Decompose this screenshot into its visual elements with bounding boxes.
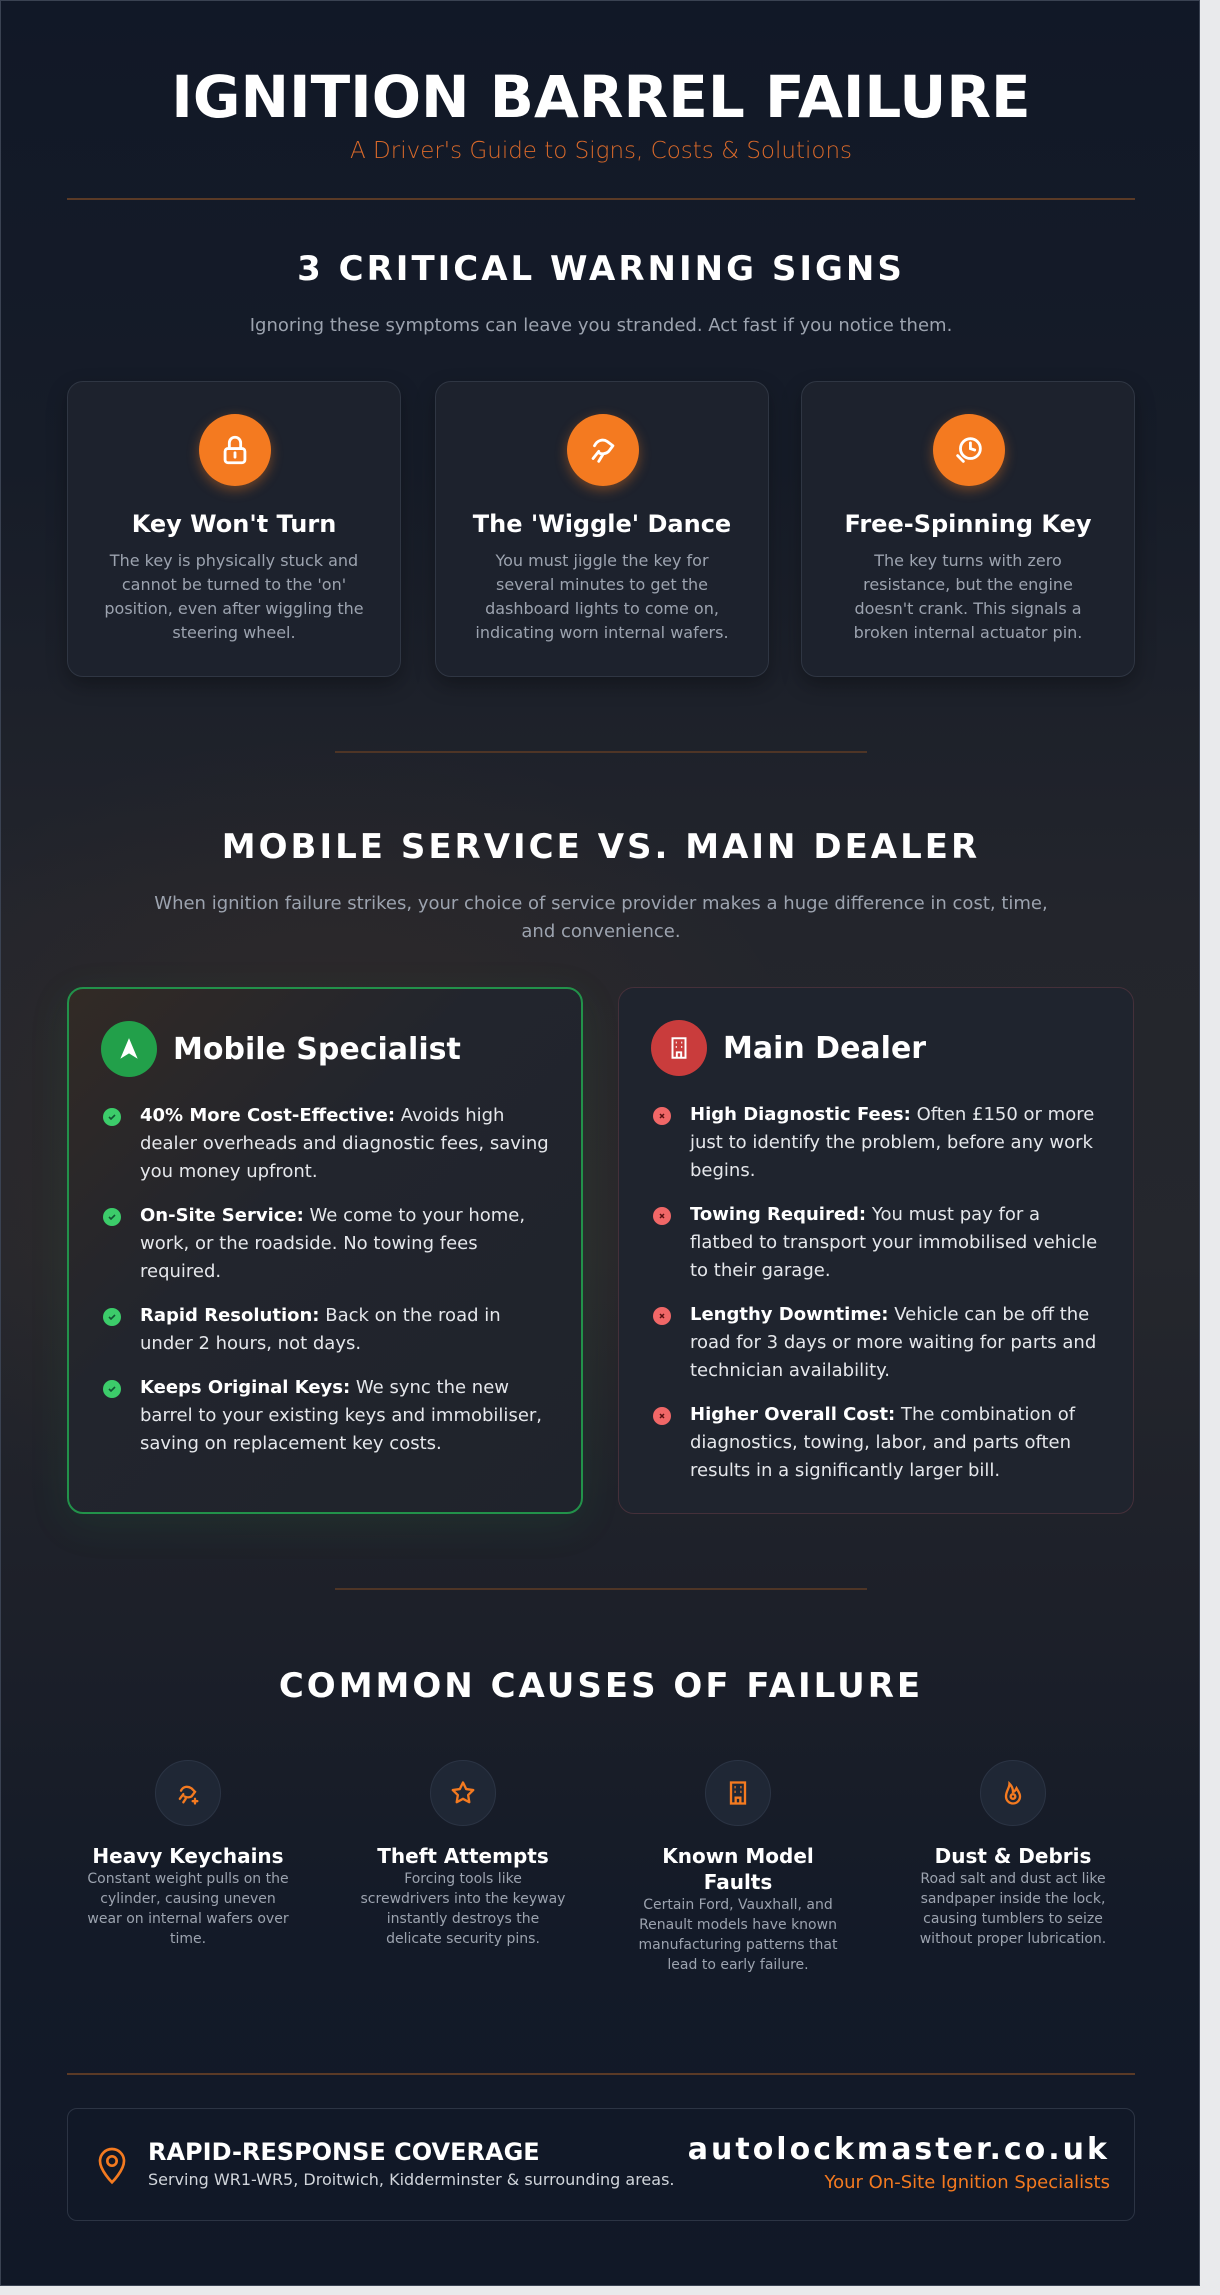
heading: warning signs: 3 CRITICAL WARNING SIGNS	[297, 249, 905, 289]
header: mobile specialist	[101, 1021, 461, 1077]
icon: star	[430, 1760, 496, 1826]
list: benefits: On-Site Service: We come to your home, work, or the roadside. No towing fees required.	[140, 1205, 525, 1282]
cause: dust: Dust & Debris	[935, 1844, 1091, 1868]
card: key won't turn: The key is physically stuck and cannot be turned to the 'on' position, even after wiggling the steering wheel.	[104, 551, 364, 642]
icon: flame	[980, 1760, 1046, 1826]
list: drawbacks	[653, 1104, 1097, 1481]
list: benefits	[103, 1105, 549, 1454]
subtitle: A Driver's Guide to Signs, Costs & Solutions	[350, 138, 852, 164]
list: benefits: Keeps Original Keys: We sync the new barrel to your existing keys and immobiliser, saving on replacement key costs.	[140, 1377, 542, 1454]
intro text: Ignoring these symptoms can leave you stranded. Act fast if you notice them.	[250, 315, 952, 336]
cause: heavy keychains: Constant weight pulls on the cylinder, causing uneven wear on internal wafers over time.	[87, 1871, 289, 1947]
icon: keychain	[155, 1760, 221, 1826]
icon: spin	[933, 414, 1005, 486]
footer panel	[67, 2108, 1135, 2221]
cause: model faults: Faults	[704, 1870, 772, 1894]
list: benefits: 40% More Cost-Effective: Avoids high dealer overheads and diagnostic fees, saving you money upfront.	[140, 1105, 549, 1182]
coverage text	[148, 2138, 674, 2189]
comparison intro: When ignition failure strikes, your choice of service provider makes a huge difference in cost, time, and convenience.	[154, 893, 1048, 942]
list: drawbacks: Higher Overall Cost: The combination of diagnostics, towing, labor, and parts often results in a significantly larger bill.	[690, 1404, 1075, 1481]
icon: map pin	[98, 2148, 126, 2184]
heading: comparison: MOBILE SERVICE VS. MAIN DEALER	[222, 827, 980, 867]
coverage text: Serving WR1-WR5, Droitwich, Kidderminster & surrounding areas.	[148, 2170, 674, 2189]
icon: lock	[199, 414, 271, 486]
card: free spinning	[801, 381, 1135, 677]
cause: dust	[920, 1760, 1106, 1947]
icon: wiggle	[567, 414, 639, 486]
card: free spinning: The key turns with zero resistance, but the engine doesn't crank. This signals a broken internal actuator pin.	[854, 551, 1082, 642]
heading: causes: COMMON CAUSES OF FAILURE	[279, 1666, 923, 1706]
cause: theft attempts	[361, 1760, 565, 1947]
card: wiggle dance: You must jiggle the key for several minutes to get the dashboard lights to come on, indicating worn internal wafers.	[475, 551, 729, 642]
card: key won't turn	[67, 381, 401, 677]
cause: heavy keychains	[87, 1760, 289, 1947]
cause: model faults	[638, 1760, 838, 1973]
title: IGNITION BARREL FAILURE	[171, 63, 1031, 131]
coverage text: RAPID-RESPONSE COVERAGE	[148, 2138, 540, 2166]
cause: theft attempts: Theft Attempts	[377, 1844, 549, 1868]
cause: dust: Road salt and dust act like sandpaper inside the lock, causing tumblers to seize without proper lubrication.	[920, 1871, 1106, 1947]
header: main dealer	[651, 1020, 926, 1076]
list: benefits: Rapid Resolution: Back on the road in under 2 hours, not days.	[140, 1305, 501, 1354]
header: main dealer: Main Dealer	[723, 1030, 926, 1066]
brand: autolockmaster.co.uk	[688, 2132, 1110, 2167]
cause: model faults: Known Model	[662, 1844, 814, 1868]
header: mobile specialist: Mobile Specialist	[173, 1032, 461, 1066]
brand: Your On-Site Ignition Specialists	[824, 2172, 1110, 2193]
brand	[688, 2132, 1110, 2193]
card: wiggle dance: The 'Wiggle' Dance	[473, 510, 731, 538]
cause: theft attempts: Forcing tools like screwdrivers into the keyway instantly destroys the delicate security pins.	[361, 1871, 565, 1947]
panel: mobile specialist	[67, 987, 583, 1514]
list: drawbacks: High Diagnostic Fees: Often £150 or more just to identify the problem, before any work begins.	[690, 1104, 1094, 1181]
list: drawbacks: Lengthy Downtime: Vehicle can be off the road for 3 days or more waiting for parts and technician availability.	[690, 1304, 1096, 1381]
cause: model faults: Certain Ford, Vauxhall, and Renault models have known manufacturing patterns that lead to early failure.	[638, 1897, 838, 1973]
list: drawbacks: Towing Required: You must pay for a flatbed to transport your immobilised vehicle to their garage.	[690, 1204, 1097, 1281]
card: free spinning: Free-Spinning Key	[844, 510, 1092, 538]
icon: building	[705, 1760, 771, 1826]
card: key won't turn: Key Won't Turn	[132, 510, 336, 538]
panel: main dealer	[618, 987, 1134, 1514]
cause: heavy keychains: Heavy Keychains	[92, 1844, 284, 1868]
card: wiggle dance	[435, 381, 769, 677]
